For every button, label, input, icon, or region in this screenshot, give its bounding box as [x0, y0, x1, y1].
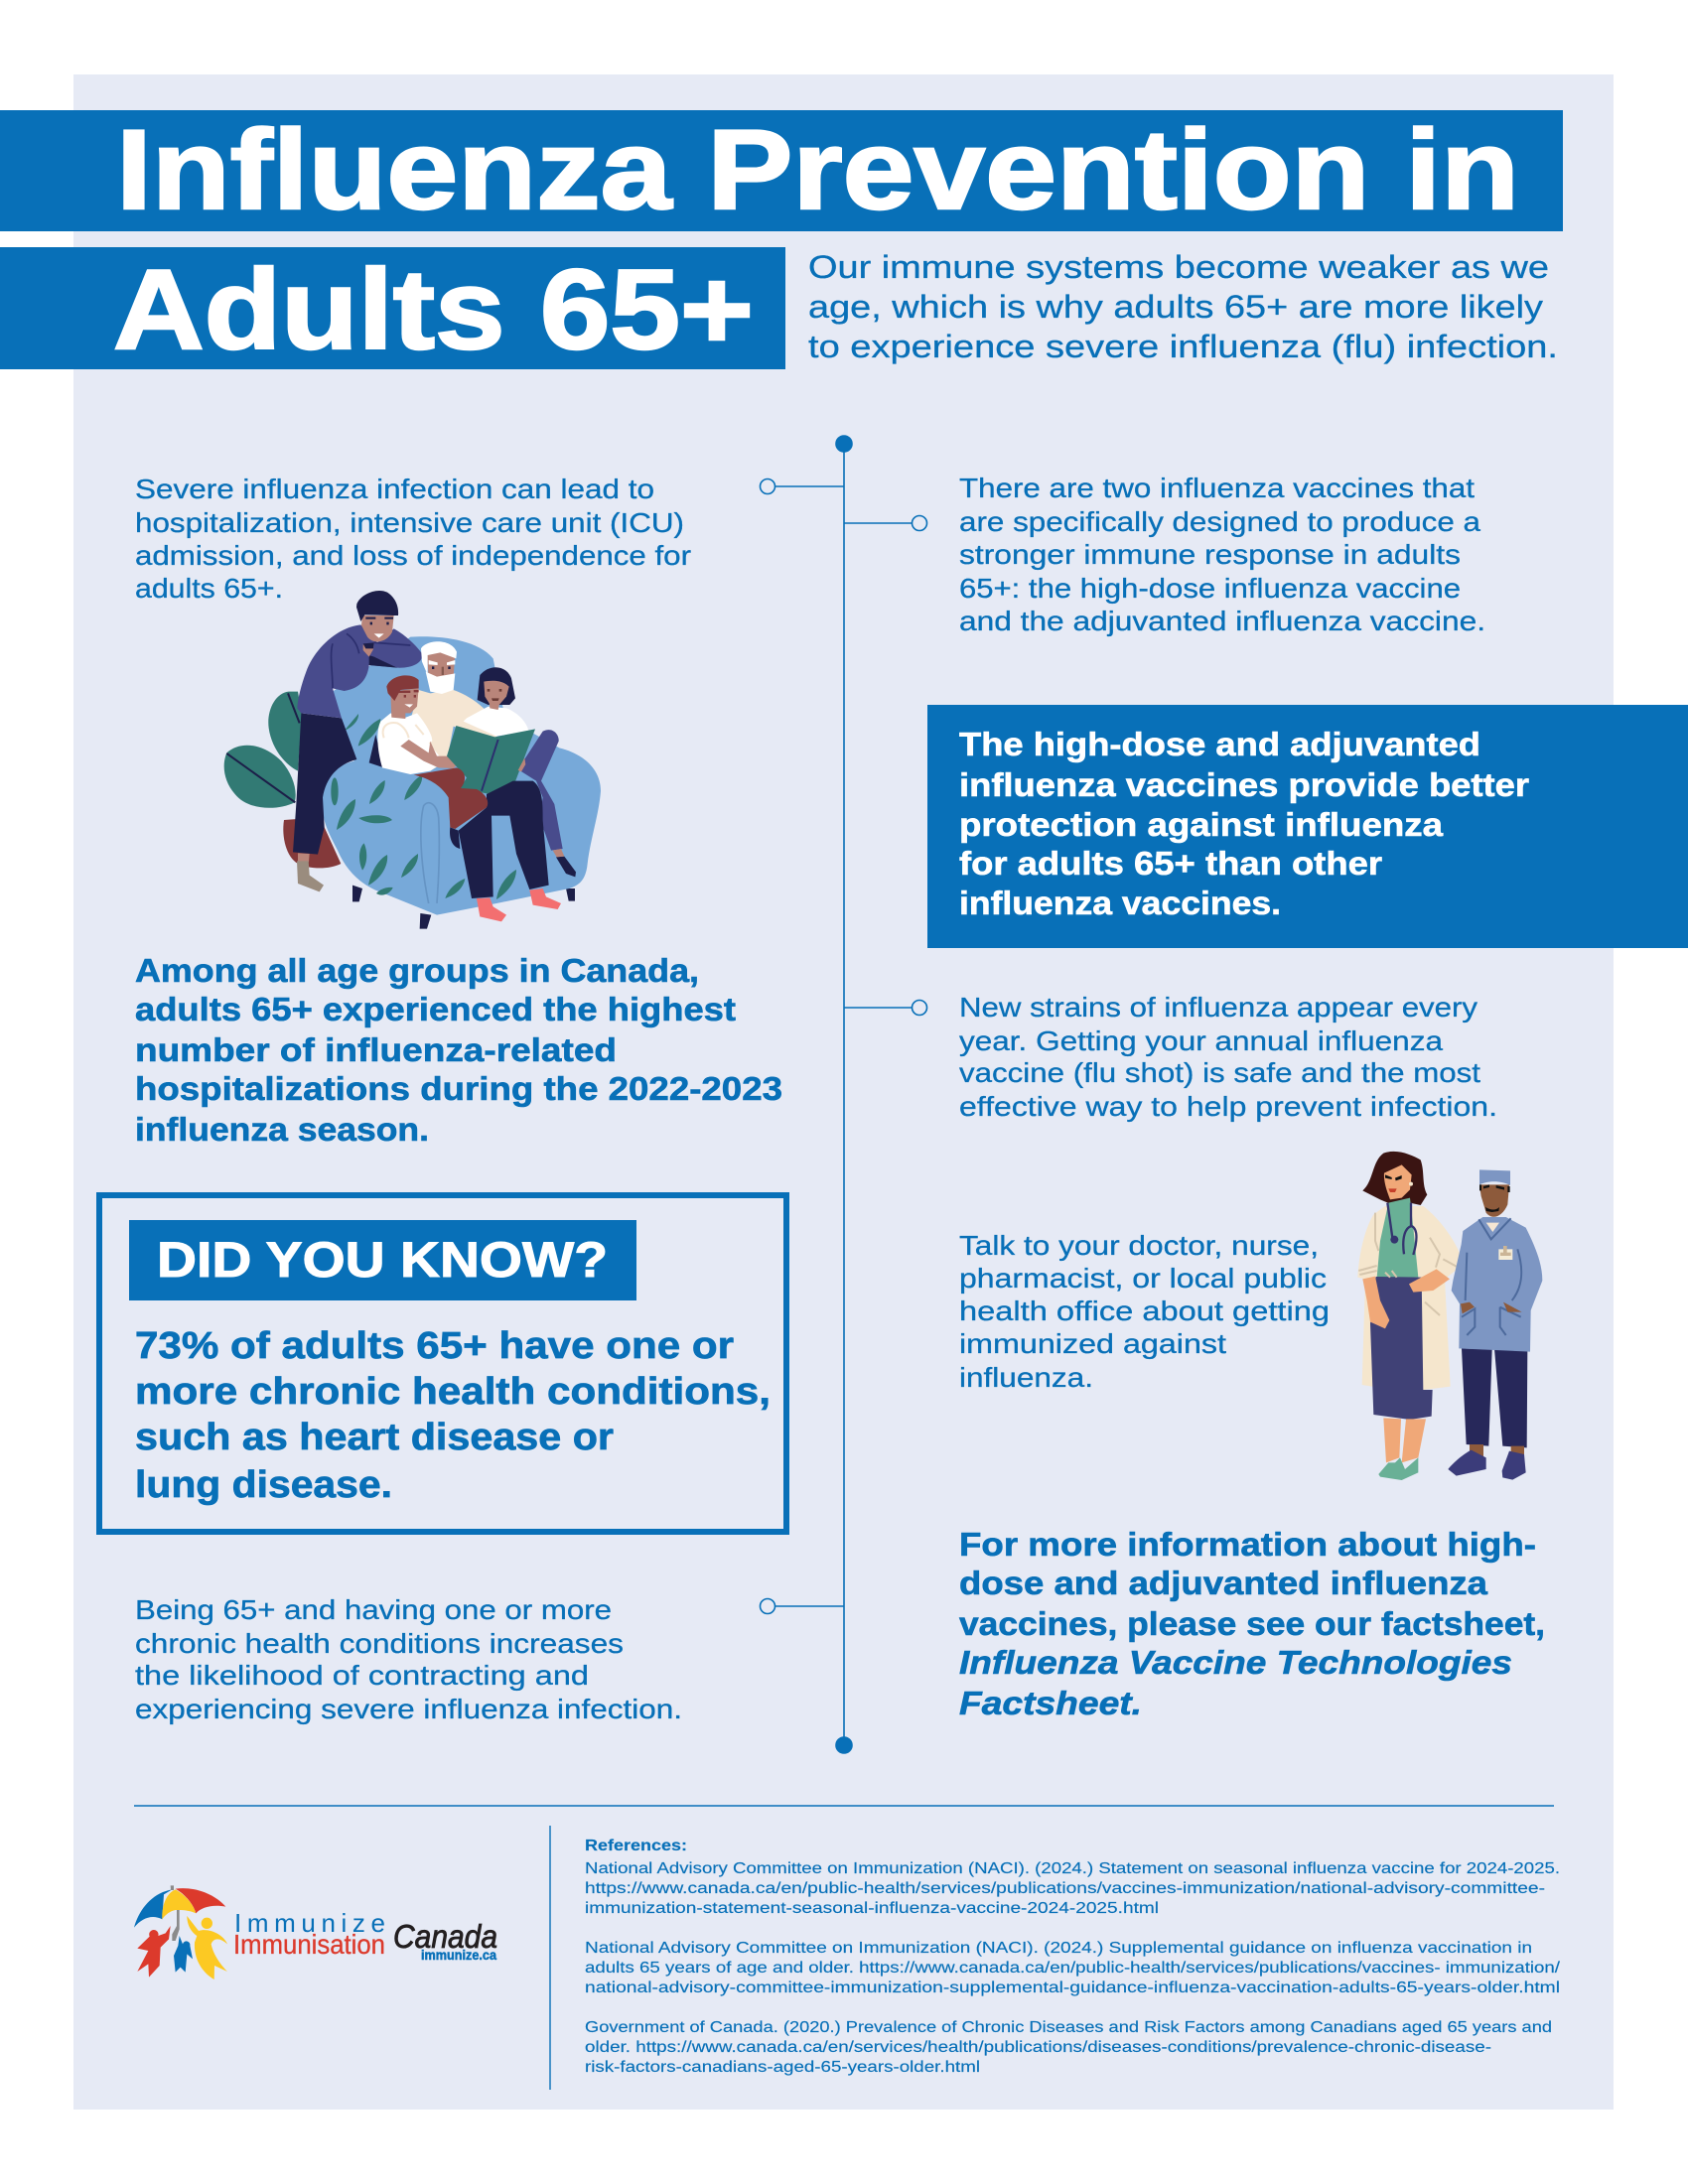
illustration: doctor and nurse — [1357, 1152, 1542, 1480]
illustration: family on armchair — [224, 591, 601, 929]
text: more information: dose and adjuvanted influenza — [959, 1565, 1488, 1601]
text: more information: vaccines, please see our factsheet, — [959, 1605, 1545, 1642]
text: two vaccines: and the adjuvanted influenza vaccine. — [959, 606, 1485, 636]
stat: highest hospitalizations: number of influenza-related — [135, 1031, 617, 1068]
text: new strains: effective way to help prevent infection. — [959, 1091, 1497, 1122]
did you know text: lung disease. — [135, 1464, 392, 1506]
text: new strains — [959, 992, 1497, 1122]
intro text: Our immune systems become weaker as we — [808, 249, 1549, 285]
callout: better protection — [927, 705, 1688, 948]
stat: highest hospitalizations — [135, 952, 782, 1148]
man standing — [293, 591, 422, 891]
did you know heading: DID YOU KNOW? — [157, 1232, 608, 1288]
references: Government of Canada. (2020.) Prevalence of Chronic Diseases and Risk Factors among Canadians aged 65 years and — [585, 2019, 1552, 2036]
text: talk to your doctor: immunized against — [959, 1328, 1226, 1359]
callout: better protection: for adults 65+ than other — [959, 845, 1382, 882]
references: older. https://www.canada.ca/en/services/health/publications/diseases-conditions/prevalence-chronic-disease- — [585, 2039, 1491, 2056]
text: new strains: vaccine (flu shot) is safe and the most — [959, 1057, 1480, 1088]
text: severe infection: admission, and loss of independence for — [135, 540, 691, 571]
callout: better protection: protection against influenza — [959, 806, 1444, 843]
logo wordmark: immunize.ca — [421, 1947, 496, 1963]
references: national-advisory-committee-immunization-supplemental-guidance-influenza-vaccination-adults-65-years-older.html — [585, 1979, 1560, 1996]
stat: highest hospitalizations: adults 65+ experienced the highest — [135, 991, 736, 1027]
text: chronic conditions risk: Being 65+ and having one or more — [135, 1594, 612, 1625]
references: risk-factors-canadians-aged-65-years-older.html — [585, 2059, 980, 2076]
did you know text: more chronic health conditions, — [135, 1371, 771, 1413]
references: immunization-statement-seasonal-influenza-vaccine-2024-2025.html — [585, 1900, 1159, 1917]
stat: highest hospitalizations: Among all age groups in Canada, — [135, 952, 699, 989]
text: chronic conditions risk — [135, 1594, 682, 1724]
doctor — [1357, 1152, 1464, 1480]
did you know heading — [129, 1220, 636, 1300]
timeline — [761, 436, 927, 1753]
intro text: to experience severe influenza (flu) infection. — [808, 329, 1558, 364]
text: chronic conditions risk: chronic health conditions increases — [135, 1628, 624, 1659]
text: two vaccines — [959, 473, 1485, 636]
text: two vaccines: There are two influenza vaccines that — [959, 473, 1475, 503]
stat: highest hospitalizations: influenza season. — [135, 1111, 429, 1148]
did you know text — [135, 1325, 771, 1506]
text: more information: Factsheet. — [959, 1685, 1142, 1721]
logo mark: umbrella and figures — [134, 1885, 227, 1979]
text: severe infection: adults 65+. — [135, 573, 283, 604]
logo wordmark: Canada — [393, 1918, 497, 1955]
callout: better protection: influenza vaccines. — [959, 885, 1281, 921]
title — [0, 107, 1563, 373]
text: talk to your doctor — [959, 1230, 1330, 1393]
text: talk to your doctor: Talk to your doctor, nurse, — [959, 1230, 1319, 1261]
logo wordmark — [233, 1908, 497, 1963]
text: talk to your doctor: health office about getting — [959, 1296, 1330, 1326]
text: new strains: year. Getting your annual influenza — [959, 1025, 1444, 1056]
text: more information — [959, 1526, 1545, 1721]
nurse — [1448, 1169, 1542, 1480]
references: https://www.canada.ca/en/public-health/services/publications/vaccines-immunization/national-advisory-committee- — [585, 1880, 1545, 1897]
did you know text: 73% of adults 65+ have one or — [135, 1325, 734, 1367]
boy — [377, 675, 461, 774]
references — [585, 1838, 1561, 2076]
girl — [478, 667, 576, 877]
text: severe infection — [135, 474, 691, 604]
book — [447, 726, 535, 794]
text: chronic conditions risk: experiencing severe influenza infection. — [135, 1694, 682, 1724]
stat: highest hospitalizations: hospitalizations during the 2022-2023 — [135, 1070, 782, 1107]
logo: Immunize Canada — [134, 1885, 497, 1979]
text: chronic conditions risk: the likelihood of contracting and — [135, 1660, 589, 1691]
logo wordmark: Immunisation — [233, 1929, 385, 1960]
text: two vaccines: stronger immune response in adults — [959, 539, 1461, 570]
did you know text: such as heart disease or — [135, 1417, 614, 1458]
armchair — [322, 636, 601, 929]
title: Adults 65+ — [113, 247, 754, 373]
text: two vaccines: 65+: the high-dose influenza vaccine — [959, 573, 1461, 604]
text: severe infection: hospitalization, intensive care unit (ICU) — [135, 507, 684, 538]
plant leaves — [224, 692, 341, 868]
references: adults 65 years of age and older. https://www.canada.ca/en/public-health/services/publications/vaccines- immunization/ — [585, 1960, 1561, 1977]
title: Influenza Prevention in — [116, 107, 1519, 233]
text: more information: Influenza Vaccine Technologies — [959, 1644, 1512, 1681]
references: National Advisory Committee on Immunization (NACI). (2024.) Supplemental guidance on influenza vaccination in — [585, 1940, 1532, 1957]
panel: did you know — [99, 1195, 786, 1532]
intro text: age, which is why adults 65+ are more likely — [808, 289, 1543, 325]
logo wordmark: Immunize — [234, 1908, 385, 1938]
text: talk to your doctor: pharmacist, or local public — [959, 1263, 1327, 1294]
grandfather — [369, 641, 528, 771]
references: References: — [585, 1838, 687, 1854]
text: severe infection: Severe influenza infection can lead to — [135, 474, 654, 504]
references: National Advisory Committee on Immunization (NACI). (2024.) Statement on seasonal influenza vaccine for 2024-2025. — [585, 1860, 1560, 1877]
callout: better protection: influenza vaccines provide better — [959, 766, 1529, 803]
callout: better protection: The high-dose and adjuvanted — [959, 726, 1480, 762]
grandfather trousers and socks — [414, 767, 561, 921]
text: talk to your doctor: influenza. — [959, 1362, 1093, 1393]
text: new strains: New strains of influenza appear every — [959, 992, 1477, 1023]
text: more information: For more information about high- — [959, 1526, 1536, 1563]
text: two vaccines: are specifically designed to produce a — [959, 506, 1481, 537]
intro text — [808, 249, 1558, 364]
